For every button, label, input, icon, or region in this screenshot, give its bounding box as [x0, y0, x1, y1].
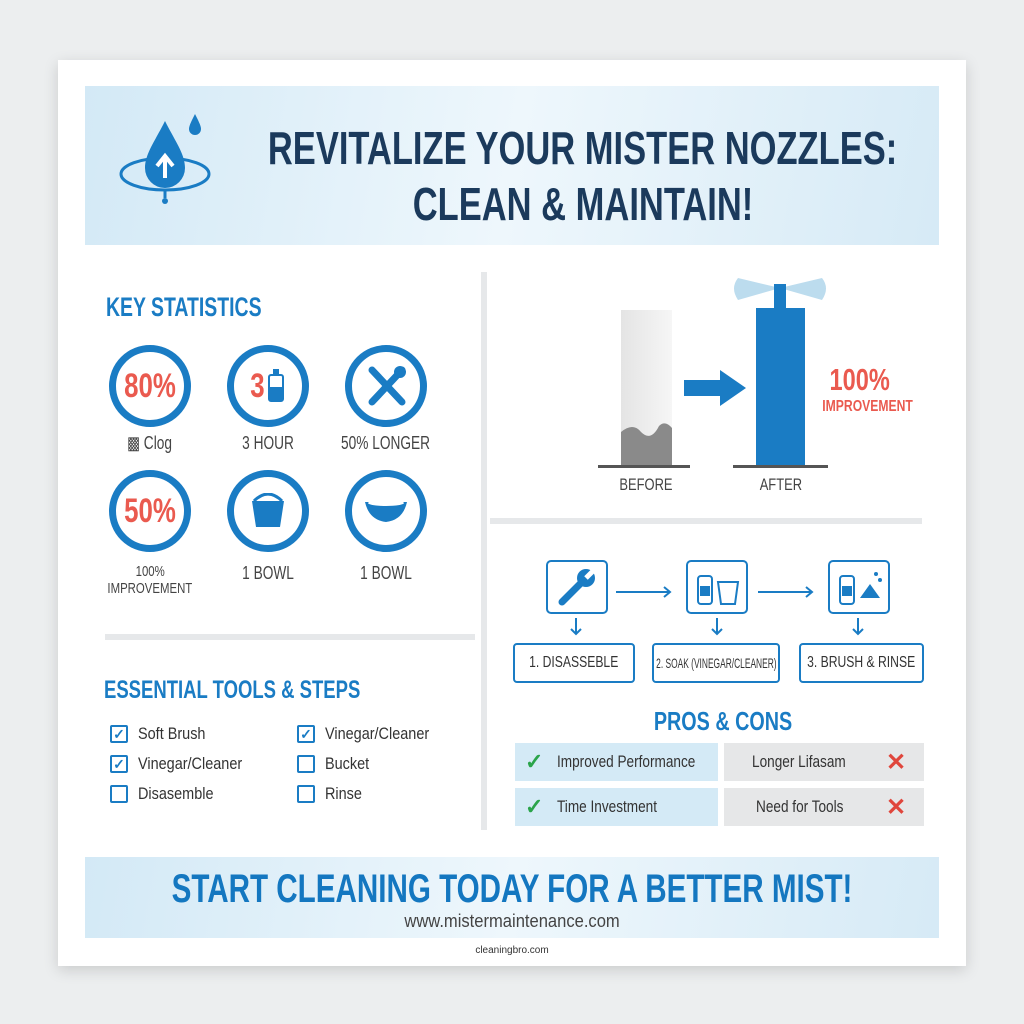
nozzle [734, 278, 826, 308]
panel: stats: 1 BOWL [360, 563, 412, 583]
step labels: 1. DISASSEBLE [529, 654, 619, 671]
callout 100%: 100% [830, 362, 890, 397]
panel: stats: 3 HOUR [242, 433, 294, 453]
pros cons table: Longer Lifasam [752, 752, 846, 771]
checklist: ✓ [113, 756, 125, 772]
chart: before after: AFTER [760, 475, 802, 494]
pros cons table [515, 743, 924, 826]
bar after [756, 308, 805, 466]
process steps [513, 560, 924, 683]
heading: key statistics: KEY STATISTICS [106, 292, 262, 322]
card [58, 60, 966, 966]
stat tools [345, 345, 427, 427]
checklist: Bucket [325, 754, 369, 773]
stat 80%: 80% [124, 366, 176, 404]
stat 80% [109, 345, 191, 427]
arrows [570, 586, 864, 636]
step labels [513, 643, 635, 683]
title: REVITALIZE YOUR MISTER NOZZLES: [268, 122, 898, 174]
pros cons table: Time Investment [557, 797, 657, 816]
process steps: 3. BRUSH & RINSE [807, 654, 916, 671]
credit: cleaningbro.com [475, 945, 549, 956]
stat 50% [109, 470, 191, 552]
checklist: Vinegar/Cleaner [325, 724, 429, 743]
callout 100%: IMPROVEMENT [822, 398, 913, 415]
pros cons table: ✕ [886, 748, 906, 776]
step 3 icon [828, 560, 890, 614]
stat bowl [345, 470, 427, 552]
checklist: Soft Brush [138, 724, 205, 743]
step 2 icon [686, 560, 748, 614]
stat bucket [227, 470, 309, 552]
checklist: Disasemble [138, 784, 213, 803]
panel: stats [108, 345, 430, 597]
checklist: Vinegar/Cleaner [138, 754, 242, 773]
pros cons table: Improved Performance [557, 752, 696, 771]
footer band [85, 857, 939, 938]
panel: stats: 1 BOWL [242, 563, 294, 583]
title [268, 122, 898, 230]
footer url: www.mistermaintenance.com [404, 911, 620, 931]
callout 100% [822, 362, 913, 415]
stat 3 [227, 345, 309, 427]
icon: water drop [120, 114, 210, 204]
checklist: Rinse [325, 784, 362, 803]
panel: stats: ▩ Clog [128, 433, 172, 453]
heading: essential tools: ESSENTIAL TOOLS & STEPS [104, 676, 360, 704]
process steps: 2. SOAK (VINEGAR/CLEANER) [656, 655, 776, 671]
pros cons table: ✕ [886, 794, 906, 820]
stat 50%: 50% [124, 492, 176, 530]
arrow [684, 370, 746, 406]
panel: stats: 50% LONGER [342, 433, 430, 453]
panel: stats: 100% [135, 563, 165, 580]
pros cons table: Need for Tools [756, 797, 843, 816]
vertical divider [481, 272, 487, 830]
title: CLEAN & MAINTAIN! [413, 178, 753, 230]
checklist: ✓ [300, 726, 312, 742]
step 1 icon [546, 560, 608, 614]
heading: pros cons: PROS & CONS [654, 706, 792, 736]
panel: stats: IMPROVEMENT [108, 580, 192, 597]
checklist: ✓ [113, 726, 125, 742]
bar before [621, 310, 672, 466]
footer cta: START CLEANING TODAY FOR A BETTER MIST! [172, 867, 852, 911]
checklist [110, 724, 429, 803]
stat 3: 3 [250, 366, 264, 404]
chart: before after [598, 278, 913, 494]
pros cons table: ✓ [525, 794, 543, 819]
chart: before after: BEFORE [619, 475, 673, 494]
pros cons table: ✓ [525, 749, 543, 774]
header band [85, 86, 939, 245]
